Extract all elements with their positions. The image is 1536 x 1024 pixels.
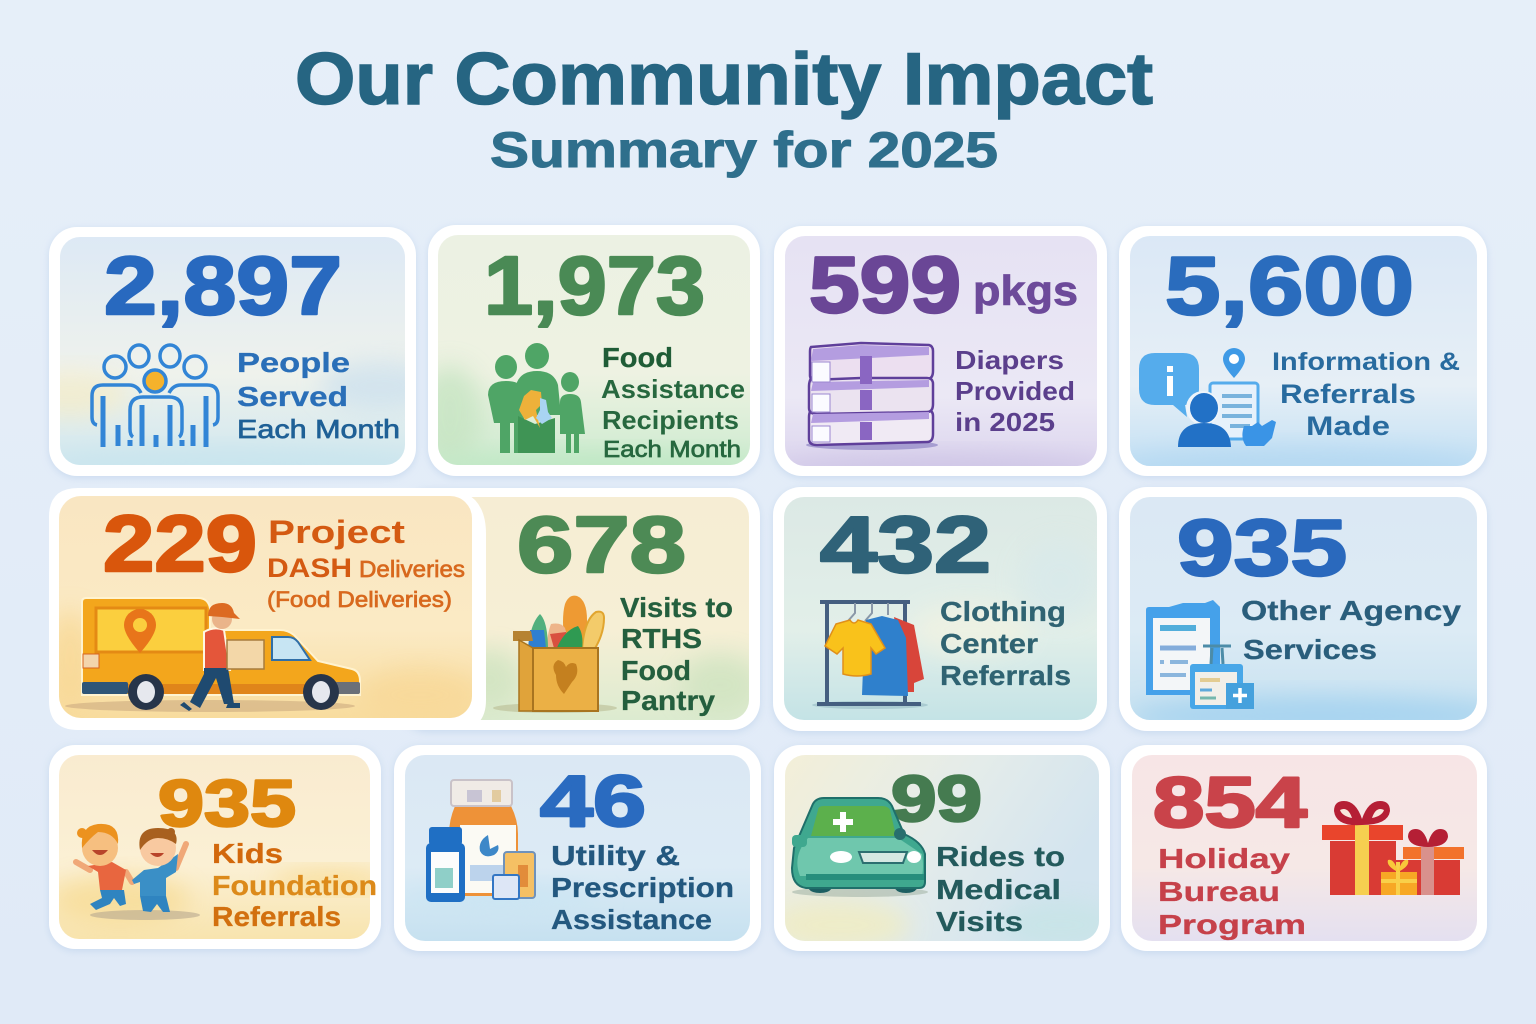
panel: information and referrals [1110,226,1490,488]
panel: people served [47,227,418,480]
number: 99: 99 [891,762,982,835]
label: Recipients [602,405,739,435]
label [940,596,1071,691]
label [936,841,1065,937]
label [955,345,1075,437]
panel: project dash [45,488,486,730]
number: 678: 678 [517,500,686,589]
panel: utility and prescription [394,745,761,951]
number: 432: 432 [820,500,991,589]
label: Visits to [620,592,733,623]
icon: delivery van and driver [65,598,360,712]
icon: two children [76,824,200,920]
number: 854: 854 [1153,764,1308,843]
panel: holiday bureau program [1121,745,1487,951]
label: Referrals [940,660,1071,691]
panel: kids foundation [49,745,390,949]
panel: other agency services [1119,487,1510,736]
icon: clothing rack [812,600,928,709]
label: (Food Deliveries) [267,587,452,612]
label [551,840,734,935]
label: Prescription [551,872,734,903]
number: 599: 599 [809,240,961,329]
icon: grocery bag [493,596,617,713]
label: Clothing [940,596,1066,627]
label: Rides to [936,841,1065,872]
label [1241,595,1462,665]
icon: info and referrals [1139,348,1276,447]
label: Program [1158,909,1306,940]
subtitle: Summary for 2025 [490,122,998,178]
label [267,514,465,612]
label [1272,348,1460,441]
label: Assistance [601,374,745,404]
icon: documents [1146,600,1254,709]
panel: rides to medical visits [770,745,1120,951]
label: Holiday [1158,843,1291,874]
label: Visits [936,906,1023,937]
label: Project [268,514,405,550]
icon: car with medical cross [792,798,928,897]
label: Made [1306,411,1390,441]
label: Utility & [551,840,680,871]
label: Referrals [1280,379,1416,409]
label [601,342,745,462]
label: Pantry [621,685,715,716]
label [1158,843,1306,940]
label: Provided [955,376,1075,406]
icon: group of people [92,345,218,447]
number: 2,897: 2,897 [104,239,342,332]
unit: pkgs: pkgs [973,267,1078,314]
label: in 2025 [955,407,1055,437]
label: Bureau [1158,876,1280,907]
icon: diaper packs [806,343,938,450]
label: RTHS [621,623,702,654]
label: DASH [267,553,352,583]
label: Each Month [603,436,741,462]
label: Foundation [212,870,377,901]
panel: clothing center [773,487,1107,731]
panel: food pantry visits [400,488,760,730]
label [620,592,733,716]
panel: food assistance [418,225,770,484]
label: Food [602,342,673,373]
label: People [237,347,350,378]
label: Assistance [551,904,712,935]
label [237,347,400,444]
number: 229: 229 [103,499,257,588]
panel: diapers [770,226,1110,486]
icon: medicine bottles [426,780,535,902]
label: Center [940,628,1038,659]
label: Information & [1272,348,1460,376]
label: Services [1243,634,1377,665]
icon: gift boxes [1322,801,1464,895]
title: Our Community Impact [295,39,1153,120]
label: Kids [212,838,283,869]
icon: family with food [488,343,585,453]
label: Served [237,381,348,412]
label: Diapers [955,345,1064,375]
label: Medical [936,874,1061,905]
number: 935: 935 [1177,503,1347,592]
label: Other Agency [1241,595,1462,626]
number: 5,600: 5,600 [1165,239,1414,332]
number: 46: 46 [540,762,646,842]
number: 935: 935 [158,766,296,840]
label: Referrals [212,901,341,932]
label: Food [621,655,691,686]
label: Deliveries [359,556,465,582]
number: 1,973: 1,973 [484,239,705,332]
label: Each Month [237,414,400,444]
label [212,838,377,932]
